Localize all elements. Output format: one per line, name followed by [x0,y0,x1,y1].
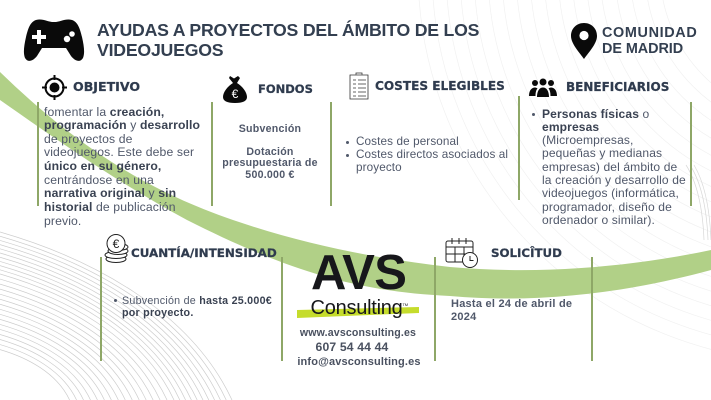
logo: AVS Consulting [297,246,419,318]
beneficiaries text: (Microempresas, [542,133,634,147]
heading: beneficiarios: BENEFICIARIOS [566,80,669,94]
contact details: www.avsconsulting.es [300,327,416,339]
divider [591,257,593,361]
funding text: Dotación [246,146,294,158]
icon: group of people [529,78,557,97]
icon: money bag [223,76,247,103]
icon: euro coins: € [113,237,120,251]
cost list [356,135,508,174]
divider [690,102,692,206]
panel: objetivo [42,75,200,228]
divider [100,257,102,361]
divider [37,102,39,206]
funding text: presupuestaria de [222,157,318,169]
title: AYUDAS A PROYECTOS DEL ÁMBITO DE LOS [97,20,479,40]
deadline text [451,298,572,322]
location label: COMUNIDAD [602,25,697,41]
cost list: Costes de personal [356,135,459,148]
bullet [346,141,349,144]
beneficiaries text [542,106,686,227]
location label [602,25,697,57]
logo wordmark: AVS [311,246,406,300]
icon: calendar with clock [446,238,478,268]
icon: map pin [571,23,597,59]
description: fomentar la creación, [44,104,164,118]
heading: fondos: FONDOS [258,82,313,96]
panel: beneficiarios [529,78,686,227]
deadline text: 2024 [451,310,476,322]
logo underline [297,306,419,318]
location label: DE MADRID [602,41,683,57]
beneficiaries text: la creación y desarrollo de [542,173,686,187]
amount text [122,295,272,319]
title: VIDEOJUEGOS [97,40,223,60]
logo subtitle: ConsultingTM [310,296,408,318]
bullet [114,299,117,302]
bullet [346,154,349,157]
panel: costes elegibles [346,72,508,174]
cost list: proyecto [356,161,402,174]
heading: cuantía/intensidad: CUANTÍA/INTENSIDAD [131,246,277,260]
funding text: 500.000 € [245,169,295,181]
description: programación y desarrollo [44,118,200,132]
contact details: info@avsconsulting.es [297,356,421,368]
description: único en su género, [44,159,161,173]
divider [434,257,436,361]
heading: costes elegibles: COSTES ELEGIBLES [375,79,505,93]
heading: solicitud: SOLICÎTUD [491,246,562,260]
divider [330,102,332,206]
panel: fondos [222,76,318,181]
title [97,20,479,60]
beneficiaries text: programador, diseño de [542,200,672,214]
description [44,104,200,228]
amount text: por proyecto. [122,307,194,319]
icon: game controller [24,20,84,61]
contact details [297,327,421,368]
description: historial de publicación [44,200,176,214]
bullet [532,113,535,116]
beneficiaries text: empresas) del ámbito de [542,160,677,174]
funding text [222,122,318,181]
icon: target [42,75,67,100]
divider [211,102,213,206]
icon: clipboard [350,72,368,100]
amount text: Subvención de hasta 25.000€ [122,295,272,307]
beneficiaries text: ordenador o similar). [542,213,655,227]
deadline text: Hasta el 24 de abril de [451,298,572,310]
panel: solicitud [446,238,572,322]
beneficiaries text: videojuegos (informática, [542,186,679,200]
beneficiaries text: Personas físicas o [542,106,649,120]
description: centrándose en una [44,173,154,187]
description: previo. [44,214,81,228]
panel: cuantía/intensidad [104,234,277,319]
description: de proyectos de [44,132,133,146]
divider [281,257,283,361]
funding text: Subvención [239,122,301,134]
heading: objetivo: OBJETIVO [73,79,140,94]
divider [518,96,520,200]
contact details: 607 54 44 44 [316,340,388,354]
beneficiaries text: pequeñas y medianas [542,146,662,160]
description: narrativa original y sin [44,186,176,200]
icon: money bag: € [232,87,239,101]
icon: euro coins [104,234,128,263]
beneficiaries text: empresas [542,120,599,134]
cost list: Costes directos asociados al [356,148,508,161]
description: videojuegos. Este debe ser [44,145,194,159]
